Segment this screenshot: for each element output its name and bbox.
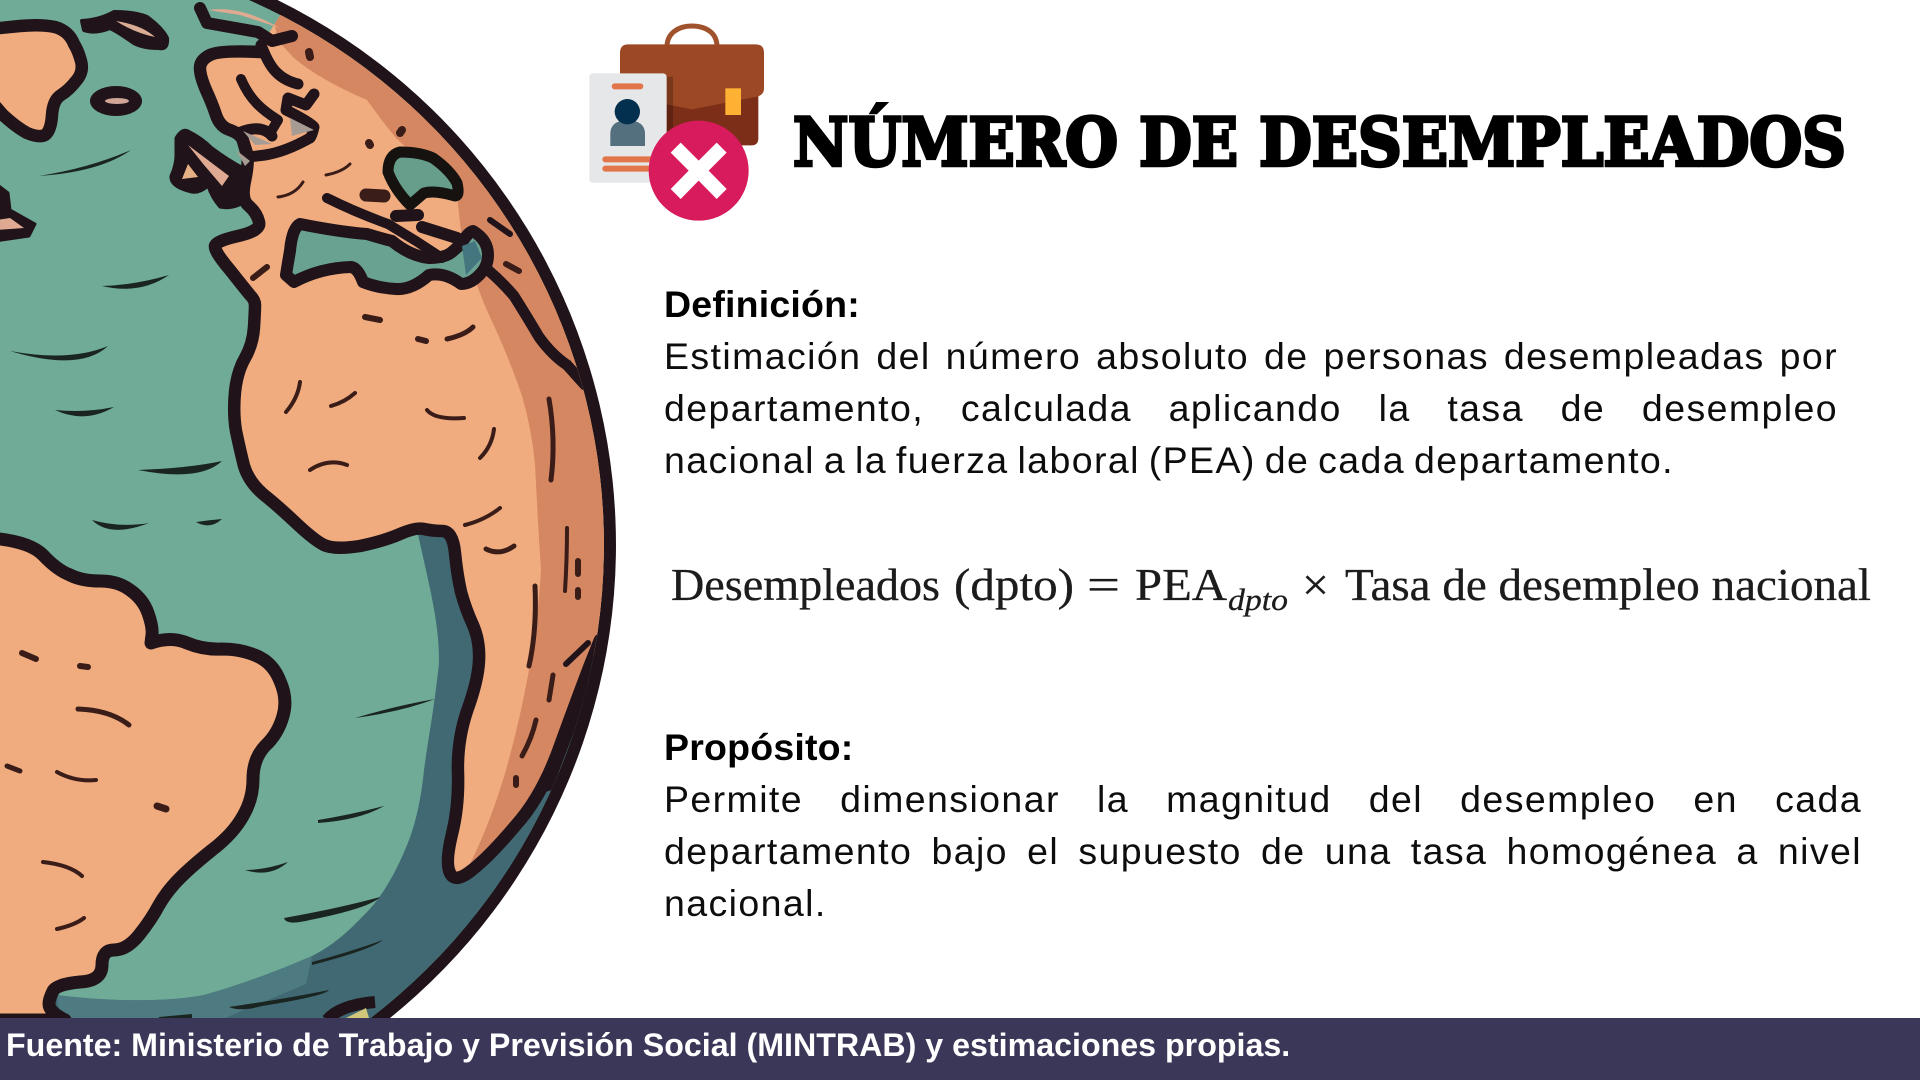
formula: × [1302, 560, 1329, 610]
Arctic island [208, 9, 280, 28]
British Isles interior [188, 145, 229, 186]
card lines [602, 156, 656, 162]
white cross [671, 143, 727, 199]
footer: source [0, 1018, 1920, 1080]
heading: definición: Definición: [664, 283, 860, 325]
card shadow [665, 77, 673, 143]
formula: PEA [1135, 560, 1228, 610]
Red Sea patch [462, 241, 482, 275]
small island [90, 86, 142, 116]
text: definición: departamento, calculada aplicando la tasa de desempleo [664, 387, 1838, 429]
text: propósito: Permite dimensionar la magnitud del desempleo en cada [664, 778, 1862, 820]
small island interior [105, 98, 129, 104]
ocean shadow [40, 534, 640, 1020]
red circle [649, 121, 749, 221]
briefcase clasp [725, 88, 741, 115]
illustration: globe [0, 0, 616, 1018]
yellow patch [346, 1008, 369, 1018]
Baltic gray patches [236, 118, 314, 166]
footer: source: Fuente: Ministerio de Trabajo y Previsión Social (MINTRAB) y estimaciones propias. [6, 1027, 1290, 1063]
ID card [589, 73, 667, 183]
formula [671, 560, 1871, 617]
globe surface [0, 0, 640, 1020]
globe outline disc [0, 0, 616, 1020]
Black Sea [388, 152, 458, 205]
ocean wave marks [10, 150, 435, 1019]
icon: briefcase with ID card and red cross [590, 24, 764, 221]
person body [610, 120, 645, 146]
formula: = [1087, 560, 1120, 610]
land coastline [200, 51, 600, 878]
Antarctica edge [327, 1002, 375, 1020]
British Isles [171, 130, 248, 208]
heading: propósito: Propósito: [664, 726, 853, 768]
text: propósito [664, 778, 1862, 924]
western island [0, 183, 35, 241]
briefcase lower body [625, 83, 758, 145]
person head [615, 99, 640, 124]
East African coast stroke [488, 270, 585, 385]
South America land [0, 538, 285, 1020]
briefcase flap [620, 44, 764, 109]
text: propósito: departamento bajo el supuesto de una tasa homogénea a nivel [664, 830, 1862, 872]
ocean shadow light band [57, 956, 312, 1018]
text: definición: Estimación del número absoluto de personas desempleadas por [664, 335, 1838, 377]
small island north interior [116, 21, 155, 37]
land marks [7, 52, 588, 929]
Europe inner strokes [200, 8, 457, 258]
ocean [0, 0, 640, 1020]
Mediterranean sea [286, 224, 488, 289]
formula: (dpto) [954, 560, 1074, 610]
text: propósito: nacional. [664, 882, 827, 924]
text: definición [664, 335, 1838, 481]
North America land [0, 25, 82, 136]
Africa and Eurasia land [206, 15, 604, 872]
card bar [612, 83, 643, 89]
land shading [274, 15, 604, 864]
western island interior [0, 218, 24, 230]
text: definición: nacional a la fuerza laboral (PEA) de cada departamento. [664, 439, 1674, 481]
formula: Tasa de desempleo nacional [1345, 560, 1871, 610]
small island north [82, 12, 167, 48]
formula: Desempleados [671, 560, 940, 610]
formula: dpto [1228, 582, 1288, 617]
briefcase handle [667, 26, 717, 47]
lower east wedge [546, 684, 588, 792]
